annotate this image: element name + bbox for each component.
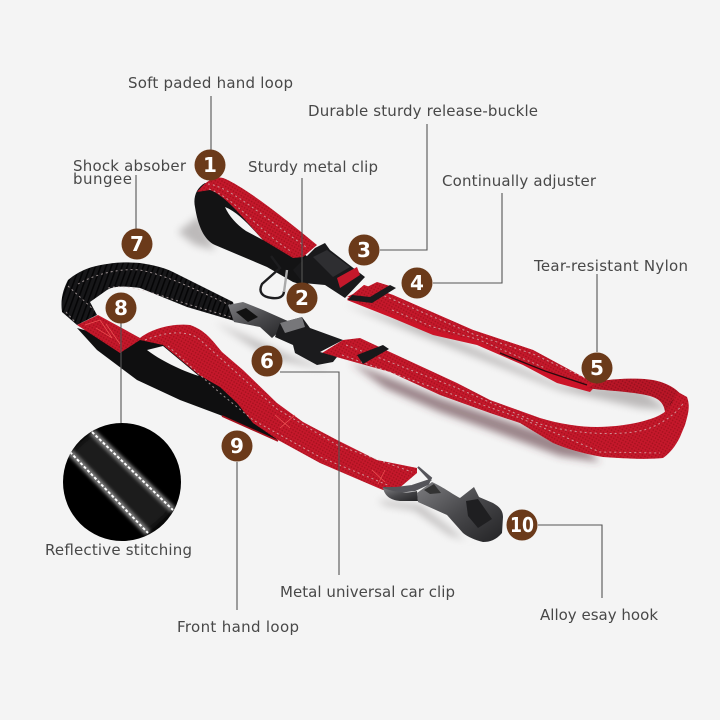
rear hand loop bbox=[194, 178, 322, 286]
front hand loop bbox=[77, 315, 417, 490]
marker 8 bbox=[106, 292, 136, 324]
stitching bbox=[208, 184, 306, 247]
label: soft padded hand loop: Soft paded hand loop bbox=[128, 74, 293, 92]
thin red edge under lining bbox=[222, 416, 278, 441]
marker 7 bbox=[122, 228, 152, 260]
marker 2: 2 bbox=[295, 286, 309, 310]
marker 6: 6 bbox=[260, 349, 274, 373]
callout lines bbox=[121, 96, 602, 610]
marker 1 bbox=[194, 150, 226, 180]
label: car clip: Metal universal car clip bbox=[280, 583, 455, 601]
lower strap cast shadow bbox=[350, 362, 600, 462]
bungee stitching bbox=[78, 270, 232, 306]
marker 10 bbox=[506, 510, 538, 540]
marker 5 bbox=[582, 352, 612, 384]
label: reflective stitching: Reflective stitching bbox=[45, 541, 192, 559]
neoprene lining bbox=[194, 183, 322, 286]
label: shock absorber bungee: Shock absober bbox=[73, 157, 187, 175]
label: nylon: Tear-resistant Nylon bbox=[533, 257, 688, 275]
label: bungee second line: bungee bbox=[73, 170, 132, 188]
adjuster upper bbox=[347, 282, 396, 303]
small carabiner bbox=[260, 256, 287, 298]
label: front hand loop: Front hand loop bbox=[177, 618, 299, 636]
marker 2 bbox=[286, 282, 318, 314]
marker 9 bbox=[222, 430, 252, 462]
red webbing bbox=[77, 315, 417, 490]
label: alloy hook: Alloy esay hook bbox=[540, 606, 658, 624]
bungee bbox=[61, 262, 238, 325]
marker 1: 1 bbox=[203, 153, 217, 177]
label: release buckle: Durable sturdy release-buckle bbox=[308, 102, 538, 120]
marker 4 bbox=[402, 268, 432, 298]
alloy hook bbox=[383, 467, 503, 542]
nylon strap lower run bbox=[322, 338, 689, 459]
reflective stitching lens bbox=[63, 423, 181, 541]
stitching on nylon bbox=[366, 288, 585, 378]
marker 10: 10 bbox=[510, 513, 534, 537]
nylon strap end loop back bbox=[587, 379, 684, 416]
stitching bbox=[145, 333, 412, 472]
marker 3: 3 bbox=[357, 238, 371, 262]
leash: long nylon strap with right end loop bbox=[322, 285, 689, 459]
black lining bbox=[77, 328, 278, 441]
nylon strap under layer bbox=[347, 285, 600, 392]
release buckle upper bbox=[293, 243, 365, 298]
dark gap line bbox=[500, 353, 587, 385]
marker 9: 9 bbox=[230, 434, 244, 458]
marker 8: 8 bbox=[114, 296, 128, 320]
label: adjuster: Continually adjuster bbox=[442, 172, 597, 190]
nylon strap upper layer bbox=[347, 285, 600, 385]
label: metal clip: Sturdy metal clip bbox=[248, 158, 378, 176]
marker 3 bbox=[348, 234, 380, 266]
marker 5: 5 bbox=[590, 356, 604, 380]
metal universal car clip buckle bbox=[228, 302, 389, 365]
marker 6 bbox=[252, 346, 282, 376]
marker 4: 4 bbox=[410, 271, 424, 295]
leash shadows bbox=[178, 215, 668, 548]
red webbing bbox=[197, 178, 317, 258]
marker 7: 7 bbox=[130, 232, 144, 256]
